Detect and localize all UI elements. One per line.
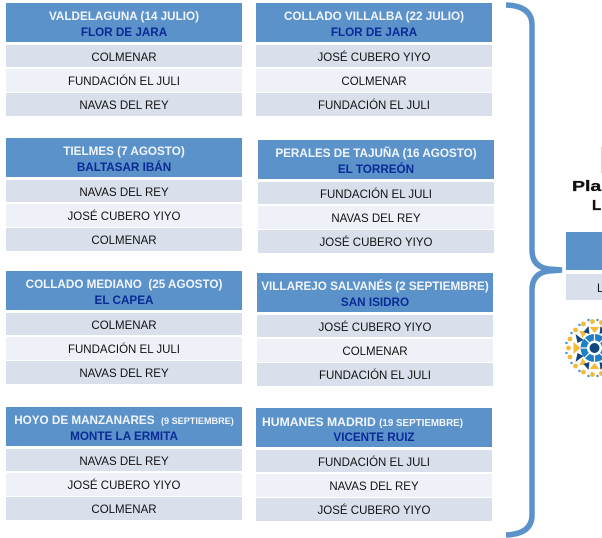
row: Navas del Rey xyxy=(256,474,492,497)
header: Perales de Tajuña, El Torreón xyxy=(258,140,494,179)
header: Perales de Tajuña, El Torreón: EL TORREÓN xyxy=(338,163,414,176)
table: Collado Villalba xyxy=(256,3,492,116)
header: Valdelaguna, Flor de Jara: VALDELAGUNA (14 JULIO) xyxy=(49,10,199,23)
header: Collado Mediano, El Capea: EL CAPEA xyxy=(95,294,153,307)
row: Navas del Rey: NAVAS DEL REY xyxy=(79,368,169,380)
row: José Cubero Yiyo xyxy=(256,45,492,67)
row: Navas del Rey xyxy=(6,93,242,116)
table: Hoyo de Manzanares xyxy=(6,407,242,520)
row: Navas del Rey xyxy=(6,449,242,471)
row: Colmenar xyxy=(6,45,242,67)
row: Colmenar xyxy=(6,497,242,520)
header: Tielmes, Baltasar Ibán: TIELMES (7 AGOSTO) xyxy=(63,145,185,158)
header: Tielmes, Baltasar Ibán xyxy=(6,138,242,177)
row: Fundación El Juli xyxy=(256,450,492,472)
row: Navas del Rey: NAVAS DEL REY xyxy=(79,456,169,468)
row: Colmenar xyxy=(6,313,242,335)
header: Hoyo de Manzanares, Monte La Ermita xyxy=(6,407,242,446)
header: Humanes Madrid, Vicente Ruiz: HUMANES MADRID (19 SEPTIEMBRE) xyxy=(262,415,463,429)
row: Navas del Rey: NAVAS DEL REY xyxy=(79,100,169,112)
row: José Cubero Yiyo xyxy=(257,315,493,337)
logo fragment: faint cropped red mark xyxy=(601,147,602,173)
row: Colmenar: COLMENAR xyxy=(341,76,407,88)
header: Hoyo de Manzanares, Monte La Ermita: MONTE LA ERMITA xyxy=(70,430,178,443)
row: Colmenar xyxy=(256,69,492,92)
row: Fundación El Juli xyxy=(256,93,492,116)
table: Collado Mediano xyxy=(6,271,242,384)
row: José Cubero Yiyo: JOSÉ CUBERO YIYO xyxy=(319,322,431,334)
heading fragment: cropped plan title xyxy=(572,178,602,214)
row: Fundación El Juli: FUNDACIÓN EL JULI xyxy=(68,344,180,356)
row: Fundación El Juli: FUNDACIÓN EL JULI xyxy=(318,100,430,112)
table: Humanes Madrid xyxy=(256,408,492,521)
header: Valdelaguna, Flor de Jara: FLOR DE JARA xyxy=(81,26,167,39)
row: Colmenar: COLMENAR xyxy=(91,320,157,332)
row: José Cubero Yiyo: JOSÉ CUBERO YIYO xyxy=(318,52,430,64)
row: Fundación El Juli xyxy=(6,337,242,360)
panel: cropped blue header box xyxy=(566,232,602,270)
table: Valdelaguna xyxy=(6,3,242,116)
row: Colmenar xyxy=(6,228,242,251)
header: Humanes Madrid, Vicente Ruiz: VICENTE RUIZ xyxy=(333,431,415,444)
header: Valdelaguna, Flor de Jara xyxy=(6,3,242,42)
row: José Cubero Yiyo xyxy=(6,204,242,227)
header: Collado Villalba, Flor de Jara: FLOR DE JARA xyxy=(331,26,417,39)
row: Navas del Rey xyxy=(6,180,242,202)
header: Collado Villalba, Flor de Jara xyxy=(256,3,492,42)
row: Fundación El Juli xyxy=(6,69,242,92)
row: José Cubero Yiyo xyxy=(6,473,242,496)
row: José Cubero Yiyo: JOSÉ CUBERO YIYO xyxy=(68,211,180,223)
header: Collado Mediano, El Capea: COLLADO MEDIANO (25 AGOSTO) xyxy=(26,278,222,291)
row: Fundación El Juli: FUNDACIÓN EL JULI xyxy=(320,189,432,201)
header: Humanes Madrid, Vicente Ruiz xyxy=(256,408,492,447)
row: Navas del Rey: NAVAS DEL REY xyxy=(329,481,419,493)
header: Villarejo Salvanés, San Isidro: SAN ISIDRO xyxy=(341,296,409,309)
row: Colmenar: COLMENAR xyxy=(91,52,157,64)
row: Fundación El Juli: FUNDACIÓN EL JULI xyxy=(318,457,430,469)
bracket: right curly brace xyxy=(506,2,562,538)
header: Collado Villalba, Flor de Jara: COLLADO VILLALBA (22 JULIO) xyxy=(284,10,464,23)
table: Perales de Tajuña xyxy=(258,140,494,253)
row: José Cubero Yiyo: JOSÉ CUBERO YIYO xyxy=(318,505,430,517)
row: Fundación El Juli: FUNDACIÓN EL JULI xyxy=(68,76,180,88)
row: Colmenar: COLMENAR xyxy=(91,235,157,247)
row: José Cubero Yiyo xyxy=(256,498,492,521)
row: Fundación El Juli xyxy=(258,182,494,204)
header: Villarejo Salvanés, San Isidro: VILLAREJO SALVANÉS (2 SEPTIEMBRE) xyxy=(261,280,489,293)
header: Hoyo de Manzanares, Monte La Ermita: HOYO DE MANZANARES (9 SEPTIEMBRE) xyxy=(14,414,234,427)
row: Navas del Rey: NAVAS DEL REY xyxy=(79,187,169,199)
header: Villarejo Salvanés, San Isidro xyxy=(257,273,493,312)
heading fragment: cropped plan title: L xyxy=(592,197,601,214)
row: José Cubero Yiyo xyxy=(258,230,494,253)
row: José Cubero Yiyo: JOSÉ CUBERO YIYO xyxy=(320,237,432,249)
row: Colmenar: COLMENAR xyxy=(342,346,408,358)
icon: cropped mandala logo xyxy=(565,318,602,378)
heading fragment: cropped plan title: Pla xyxy=(572,178,601,195)
row: Navas del Rey xyxy=(6,361,242,384)
header: Collado Mediano, El Capea xyxy=(6,271,242,310)
row: Fundación El Juli xyxy=(257,363,493,386)
panel: cropped row xyxy=(566,274,602,300)
table: Tielmes xyxy=(6,138,242,251)
header: Perales de Tajuña, El Torreón: PERALES DE TAJUÑA (16 AGOSTO) xyxy=(275,147,477,160)
row: José Cubero Yiyo: JOSÉ CUBERO YIYO xyxy=(68,480,180,492)
row: Navas del Rey: NAVAS DEL REY xyxy=(331,213,421,225)
table: Villarejo Salvanés xyxy=(257,273,493,386)
row: Fundación El Juli: FUNDACIÓN EL JULI xyxy=(319,370,431,382)
row: Colmenar: COLMENAR xyxy=(91,504,157,516)
row: Navas del Rey xyxy=(258,206,494,229)
row: Colmenar xyxy=(257,339,493,362)
header: Tielmes, Baltasar Ibán: BALTASAR IBÁN xyxy=(77,161,171,174)
